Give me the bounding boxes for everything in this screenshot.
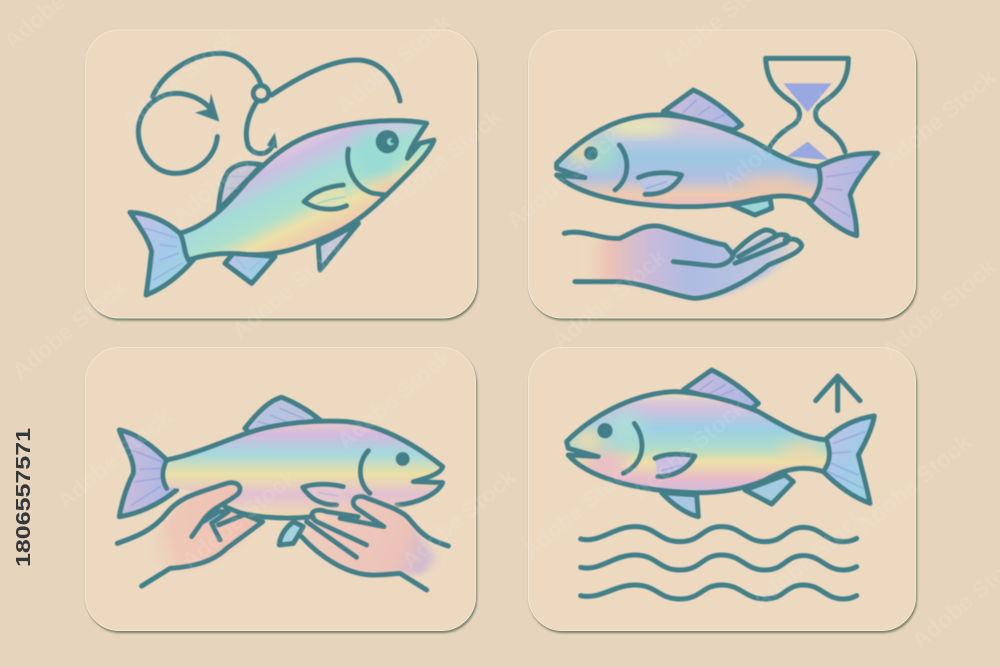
fish body [163, 421, 443, 518]
watermark: repeated stock text: Adobe Stock [332, 343, 456, 454]
fish fins [663, 90, 878, 236]
card background [528, 348, 916, 630]
fish body [557, 115, 820, 207]
watermark: repeated stock text: Adobe Stock [332, 8, 456, 119]
fish body [567, 392, 829, 493]
fish fins [119, 397, 320, 545]
watermark: repeated stock text: Adobe Stock [52, 403, 176, 514]
icon: left hand [117, 482, 263, 586]
watermark: repeated stock text: Adobe Stock [627, 393, 751, 504]
watermark: repeated stock text: Adobe Stock [397, 463, 521, 574]
fish fins [130, 163, 358, 295]
watermark: repeated stock text: Adobe Stock [167, 118, 291, 229]
icon: hook with cycle arrow and fish [130, 53, 434, 295]
panel: hook and recycle catch [86, 30, 476, 318]
icon: two hands cradling fish [117, 397, 448, 590]
panel: fish held in hand with hourglass [528, 30, 916, 318]
fish fins [662, 370, 874, 517]
watermark: repeated stock text: Adobe Stock [117, 23, 241, 134]
icon: up arrow [816, 376, 860, 411]
watermark: repeated stock text: Adobe Stock [852, 428, 976, 539]
fish body [180, 119, 434, 260]
card background [528, 30, 916, 318]
watermark: repeated stock text: Adobe Stock [517, 453, 641, 564]
icon: open hand [564, 226, 802, 298]
icon: circular arrow [138, 93, 219, 173]
watermark: repeated stock text: Adobe Stock [877, 63, 1000, 174]
image id number: 1806557571 [13, 428, 35, 567]
fish details: gill, fin, eye [584, 145, 682, 194]
icon: fish over waves [567, 370, 874, 599]
panel: fish above water with up arrow [528, 348, 916, 630]
watermark: repeated stock text: Adobe Stock [177, 463, 301, 574]
watermark: repeated stock text: Adobe Stock [747, 503, 871, 614]
watermark: repeated stock text: Adobe Stock [502, 123, 626, 234]
icon: right hand [302, 496, 448, 590]
panel: hands holding fish [86, 348, 476, 630]
icon: fishing line and hook [153, 53, 400, 154]
watermark: repeated stock text: Adobe Stock [547, 243, 671, 354]
watermark: repeated stock text: Adobe Stock [382, 103, 506, 214]
fish details: gill, fin, eye [597, 423, 695, 477]
watermark: repeated stock text: Adobe Stock [717, 83, 841, 194]
watermark: repeated stock text: Adobe Stock [227, 233, 351, 344]
icon: hourglass [766, 58, 848, 160]
icon: fish with hourglass and open hand [557, 58, 878, 298]
watermark: repeated stock text: Adobe Stock [7, 273, 131, 384]
fish details: gill, fin, eye [303, 451, 410, 505]
card background [86, 30, 476, 318]
fish details: gill, fin, eye [304, 130, 399, 209]
card background [86, 348, 476, 630]
watermark: repeated stock text: Adobe Stock [877, 253, 1000, 364]
icon: waves [581, 527, 857, 599]
